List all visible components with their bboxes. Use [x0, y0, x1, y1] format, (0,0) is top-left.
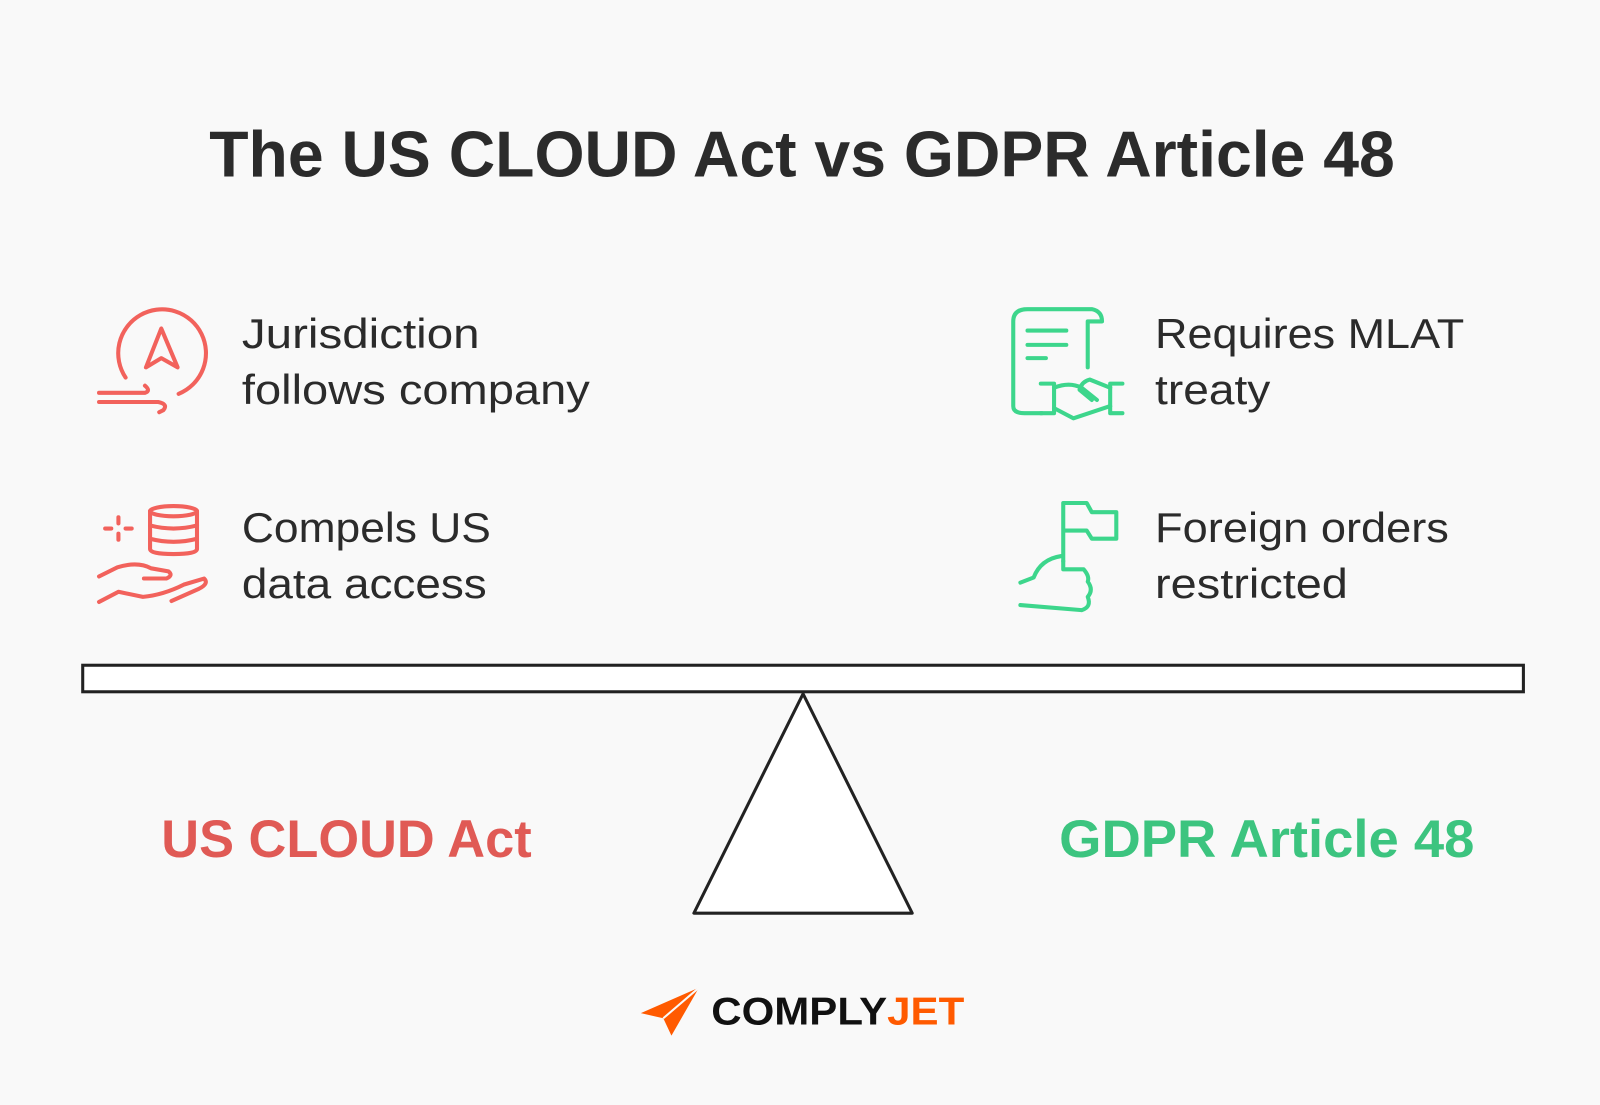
text: foreign orders restricted: Foreign orders [1155, 504, 1449, 551]
label: US CLOUD Act: US CLOUD Act [161, 810, 532, 869]
text: treaty [1155, 366, 1270, 413]
icon: database in hand [99, 506, 206, 602]
text: data access [242, 560, 487, 607]
text: follows company [242, 366, 590, 413]
icon: navigation jurisdiction [99, 309, 206, 412]
scale beam [83, 665, 1523, 692]
title: The US CLOUD Act vs GDPR Article 48 [209, 118, 1395, 191]
text: jurisdiction follows company: Jurisdiction [242, 310, 480, 357]
text: compels US data access: Compels US [242, 504, 491, 551]
label: GDPR Article 48: GDPR Article 48 [1059, 810, 1474, 869]
text: restricted [1155, 560, 1348, 607]
icon: treaty scroll handshake [1013, 309, 1122, 418]
scale fulcrum [694, 694, 912, 913]
text: requires MLAT treaty: Requires MLAT [1155, 310, 1464, 357]
logo: complyjet [641, 988, 965, 1036]
icon: hand holding flag [1020, 503, 1116, 610]
logo: complyjet: COMPLY JET [711, 990, 965, 1033]
